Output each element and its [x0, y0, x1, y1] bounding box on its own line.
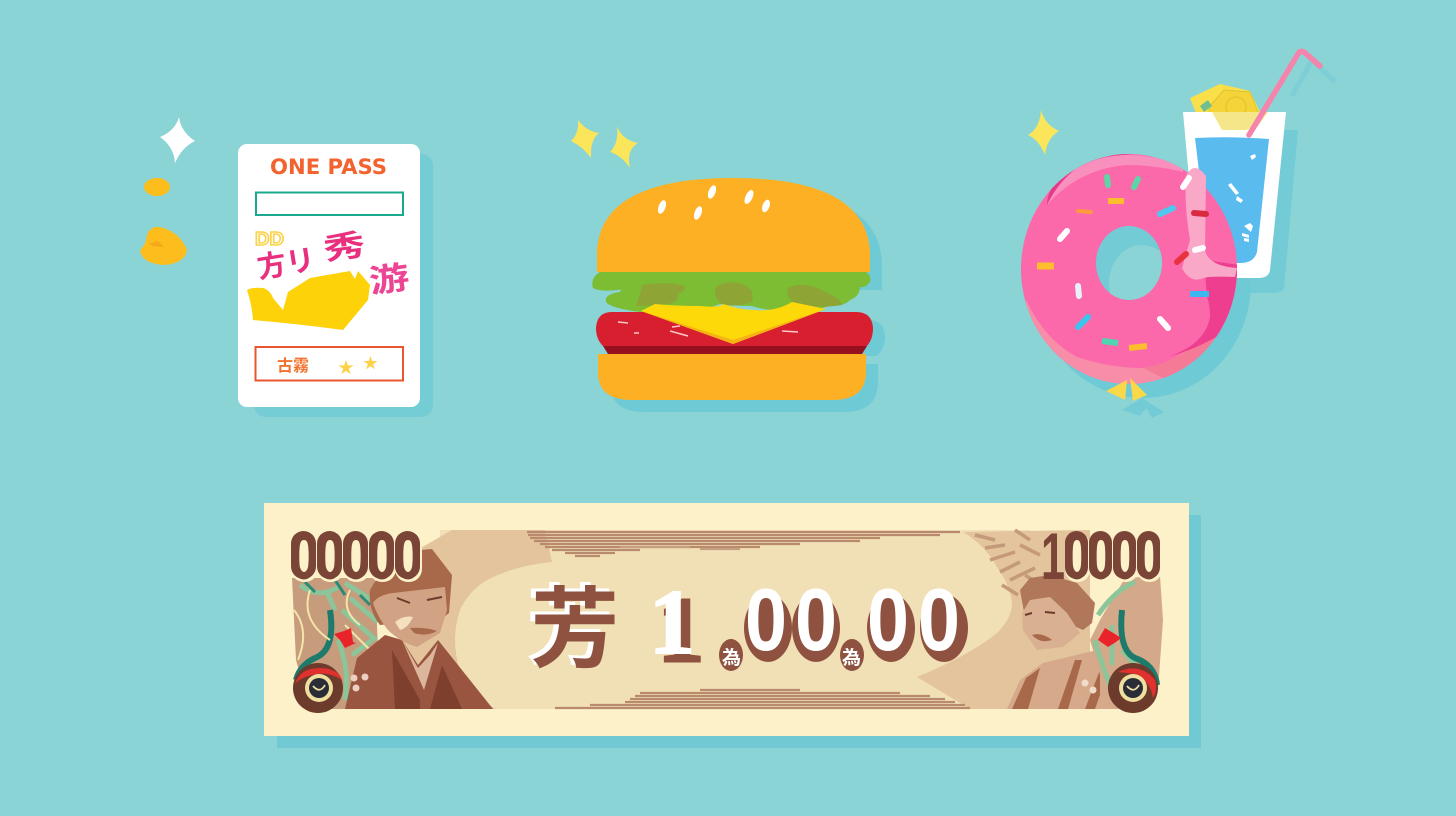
separator mark two [840, 639, 864, 671]
patty dark edge [603, 346, 867, 354]
lettuce shade [636, 282, 842, 307]
hair [370, 549, 452, 625]
large amount second group: 0 [918, 570, 960, 669]
banknote shadow [277, 515, 1201, 748]
ice flecks [1228, 154, 1256, 242]
card body [238, 144, 420, 407]
translucent glass through donut [1182, 168, 1237, 280]
cheese [641, 302, 826, 344]
bottom engraved band [555, 690, 970, 708]
donut hole [1096, 226, 1162, 300]
top engraved band [527, 532, 960, 556]
right ornament green [1095, 582, 1135, 690]
right flower [1098, 628, 1121, 647]
straw shadow [1292, 60, 1335, 96]
left ornament [292, 578, 378, 713]
left portrait [345, 549, 493, 709]
icon: burger sparkles [571, 120, 638, 168]
yellow letters: DD [255, 229, 284, 249]
hole inner background [1109, 245, 1162, 300]
separator mark two: 為 [842, 647, 861, 669]
pink handwritten text: 方リ [255, 243, 317, 285]
separator mark one [719, 639, 743, 671]
cheek highlight [395, 617, 413, 630]
bottom bun [598, 354, 866, 400]
large amount first group [744, 570, 840, 669]
left corner numerals: 00000 [291, 519, 421, 593]
right mouth [1032, 634, 1052, 641]
panel: one pass card [238, 144, 433, 417]
icon: donut sparkle [1028, 110, 1059, 155]
drink shadow [1200, 130, 1298, 293]
separator mark one: 為 [722, 647, 741, 669]
large amount second group: 0 [867, 570, 909, 669]
cheese edge [641, 309, 826, 344]
lemon green mark [1200, 100, 1212, 112]
donut shadow [1035, 168, 1251, 398]
ornament green [300, 583, 378, 700]
eyes [397, 597, 442, 603]
top highlight [1047, 155, 1183, 205]
orange label: 古霧 [277, 357, 309, 375]
patty [596, 312, 873, 347]
right kimono folds [1012, 660, 1100, 709]
collar [402, 640, 438, 690]
left blossoms [350, 674, 368, 692]
straw [1249, 51, 1320, 135]
right tan shape [917, 530, 1090, 709]
bow shadow [1122, 398, 1164, 418]
ornament base [292, 578, 378, 709]
large symbol: 芳 [531, 559, 619, 686]
donut body [1021, 154, 1237, 384]
lemon slice [1226, 97, 1246, 117]
lemon garnish [1190, 84, 1268, 138]
glass [1183, 112, 1286, 278]
drink and donut [1020, 51, 1335, 418]
center field [440, 530, 1030, 709]
right face [1022, 597, 1080, 650]
large amount first group: 0 [795, 570, 837, 669]
right ornament base [1090, 576, 1163, 709]
blue drink [1195, 137, 1269, 263]
large amount digit one: 1 [649, 571, 695, 673]
sesame seeds [656, 184, 772, 221]
empty green field [256, 192, 403, 215]
kimono dark folds [392, 650, 462, 709]
right ornament [1090, 576, 1163, 713]
pink handwritten text: 游 [367, 259, 412, 300]
right portrait [1007, 575, 1113, 709]
burger shadow [609, 188, 885, 412]
right blossoms [1082, 680, 1096, 694]
card title: ONE PASS [270, 155, 387, 179]
large amount digit one: 1 [658, 579, 704, 681]
large amount second group [867, 570, 968, 669]
spiral medallion [293, 663, 343, 713]
pink handwritten text: 秀 [321, 228, 368, 267]
right corner numerals: 10000 [1041, 519, 1161, 593]
right ornament teal swirl [1121, 610, 1157, 685]
burger [592, 178, 885, 412]
rim light [1026, 282, 1236, 384]
banknote paper [264, 503, 1189, 736]
right kimono [1007, 650, 1113, 709]
ornament cream lines [294, 590, 370, 660]
donut lower rim [1026, 154, 1237, 384]
top crescent [1047, 154, 1131, 205]
right crescent [1167, 260, 1240, 357]
red flower [334, 628, 356, 648]
rim warm shade [1144, 299, 1234, 378]
right spiral medallion [1108, 663, 1158, 713]
orange field [256, 347, 403, 380]
right corner numerals [1041, 519, 1162, 593]
yellow ticket shape [247, 271, 370, 330]
face [373, 587, 447, 647]
star right: ★ [363, 355, 378, 372]
panel: 10000 yen banknote [264, 503, 1201, 748]
large symbol: 芳 [526, 556, 614, 683]
icon: small yellow blob [144, 178, 170, 196]
donut bow [1106, 378, 1147, 401]
left tan shape [400, 530, 552, 709]
card shadow [254, 154, 433, 417]
stars: ★ [338, 360, 354, 377]
lemon front [1209, 90, 1258, 131]
right hair [1020, 575, 1095, 630]
icon: large yellow blob [140, 227, 187, 265]
lettuce [592, 272, 870, 312]
ornament teal swirl [296, 610, 331, 680]
pink handwritten text [255, 228, 412, 300]
right corner speckle [975, 530, 1040, 595]
ornament teal flecks [305, 580, 370, 605]
sprinkles [1037, 177, 1209, 348]
icon: white sparkle [160, 117, 195, 163]
lemon back [1190, 84, 1268, 138]
top bun [597, 178, 870, 272]
right eyes [1025, 612, 1055, 615]
large amount first group: 0 [745, 570, 787, 669]
lemon in glass [1212, 112, 1268, 130]
patty highlights [618, 322, 798, 336]
mouth [410, 628, 437, 635]
kimono [345, 635, 493, 709]
